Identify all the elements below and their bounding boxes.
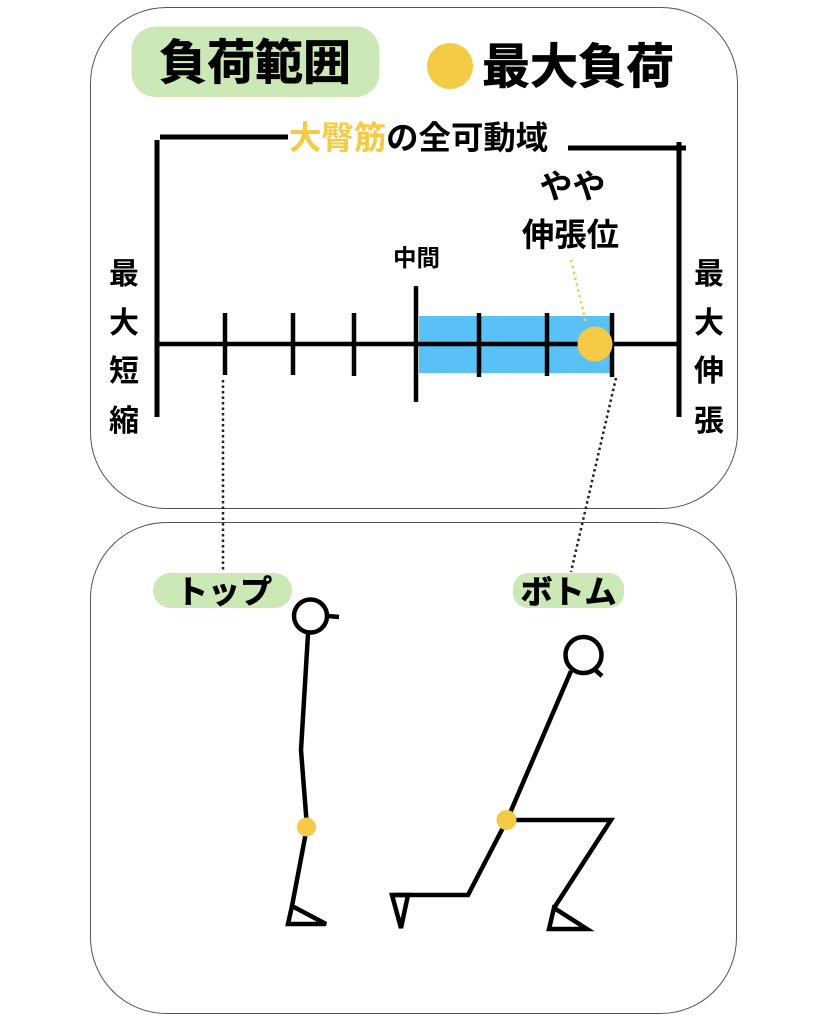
dotted leader: top position xyxy=(222,380,224,572)
bracket: full range of motion xyxy=(157,137,686,417)
label: maximum stretch xyxy=(694,258,724,438)
label: top xyxy=(153,573,292,610)
load range band xyxy=(419,316,612,373)
label: slightly stretched xyxy=(522,168,619,253)
label: middle: 中間 xyxy=(393,245,440,271)
label: maximum stretch: 大 xyxy=(694,307,724,340)
label: maximum stretch: 伸 xyxy=(694,355,724,388)
dotted leader: marker label xyxy=(571,260,586,323)
label: slightly stretched: やや xyxy=(540,168,606,205)
heading: load range: 負荷範囲 xyxy=(159,37,351,90)
label: top: トップ xyxy=(176,574,272,610)
label: maximum stretch: 最 xyxy=(694,258,724,291)
dotted leader: bottom position xyxy=(571,378,616,572)
label: maximum stretch: 張 xyxy=(694,405,724,438)
panel: load range xyxy=(90,8,738,508)
maximum load marker xyxy=(578,326,612,362)
label: bottom: ボトム xyxy=(520,574,617,610)
label: maximum shortening xyxy=(109,258,139,438)
label: full range of motion of gluteus maximus: 大臀筋の全可動域 xyxy=(289,120,548,156)
figure: top position xyxy=(288,600,339,924)
heading: load range xyxy=(132,26,380,97)
figure: bottom position xyxy=(392,637,611,929)
label: maximum shortening: 最 xyxy=(109,258,139,291)
legend: maximum load: 最大負荷 xyxy=(482,41,674,94)
panel: exercise positions xyxy=(90,522,736,1014)
range axis with ticks xyxy=(157,286,678,402)
label: slightly stretched: 伸張位 xyxy=(522,217,619,253)
label: maximum shortening: 短 xyxy=(109,355,139,388)
label: maximum shortening: 大 xyxy=(109,307,139,340)
label: maximum shortening: 縮 xyxy=(109,405,139,438)
